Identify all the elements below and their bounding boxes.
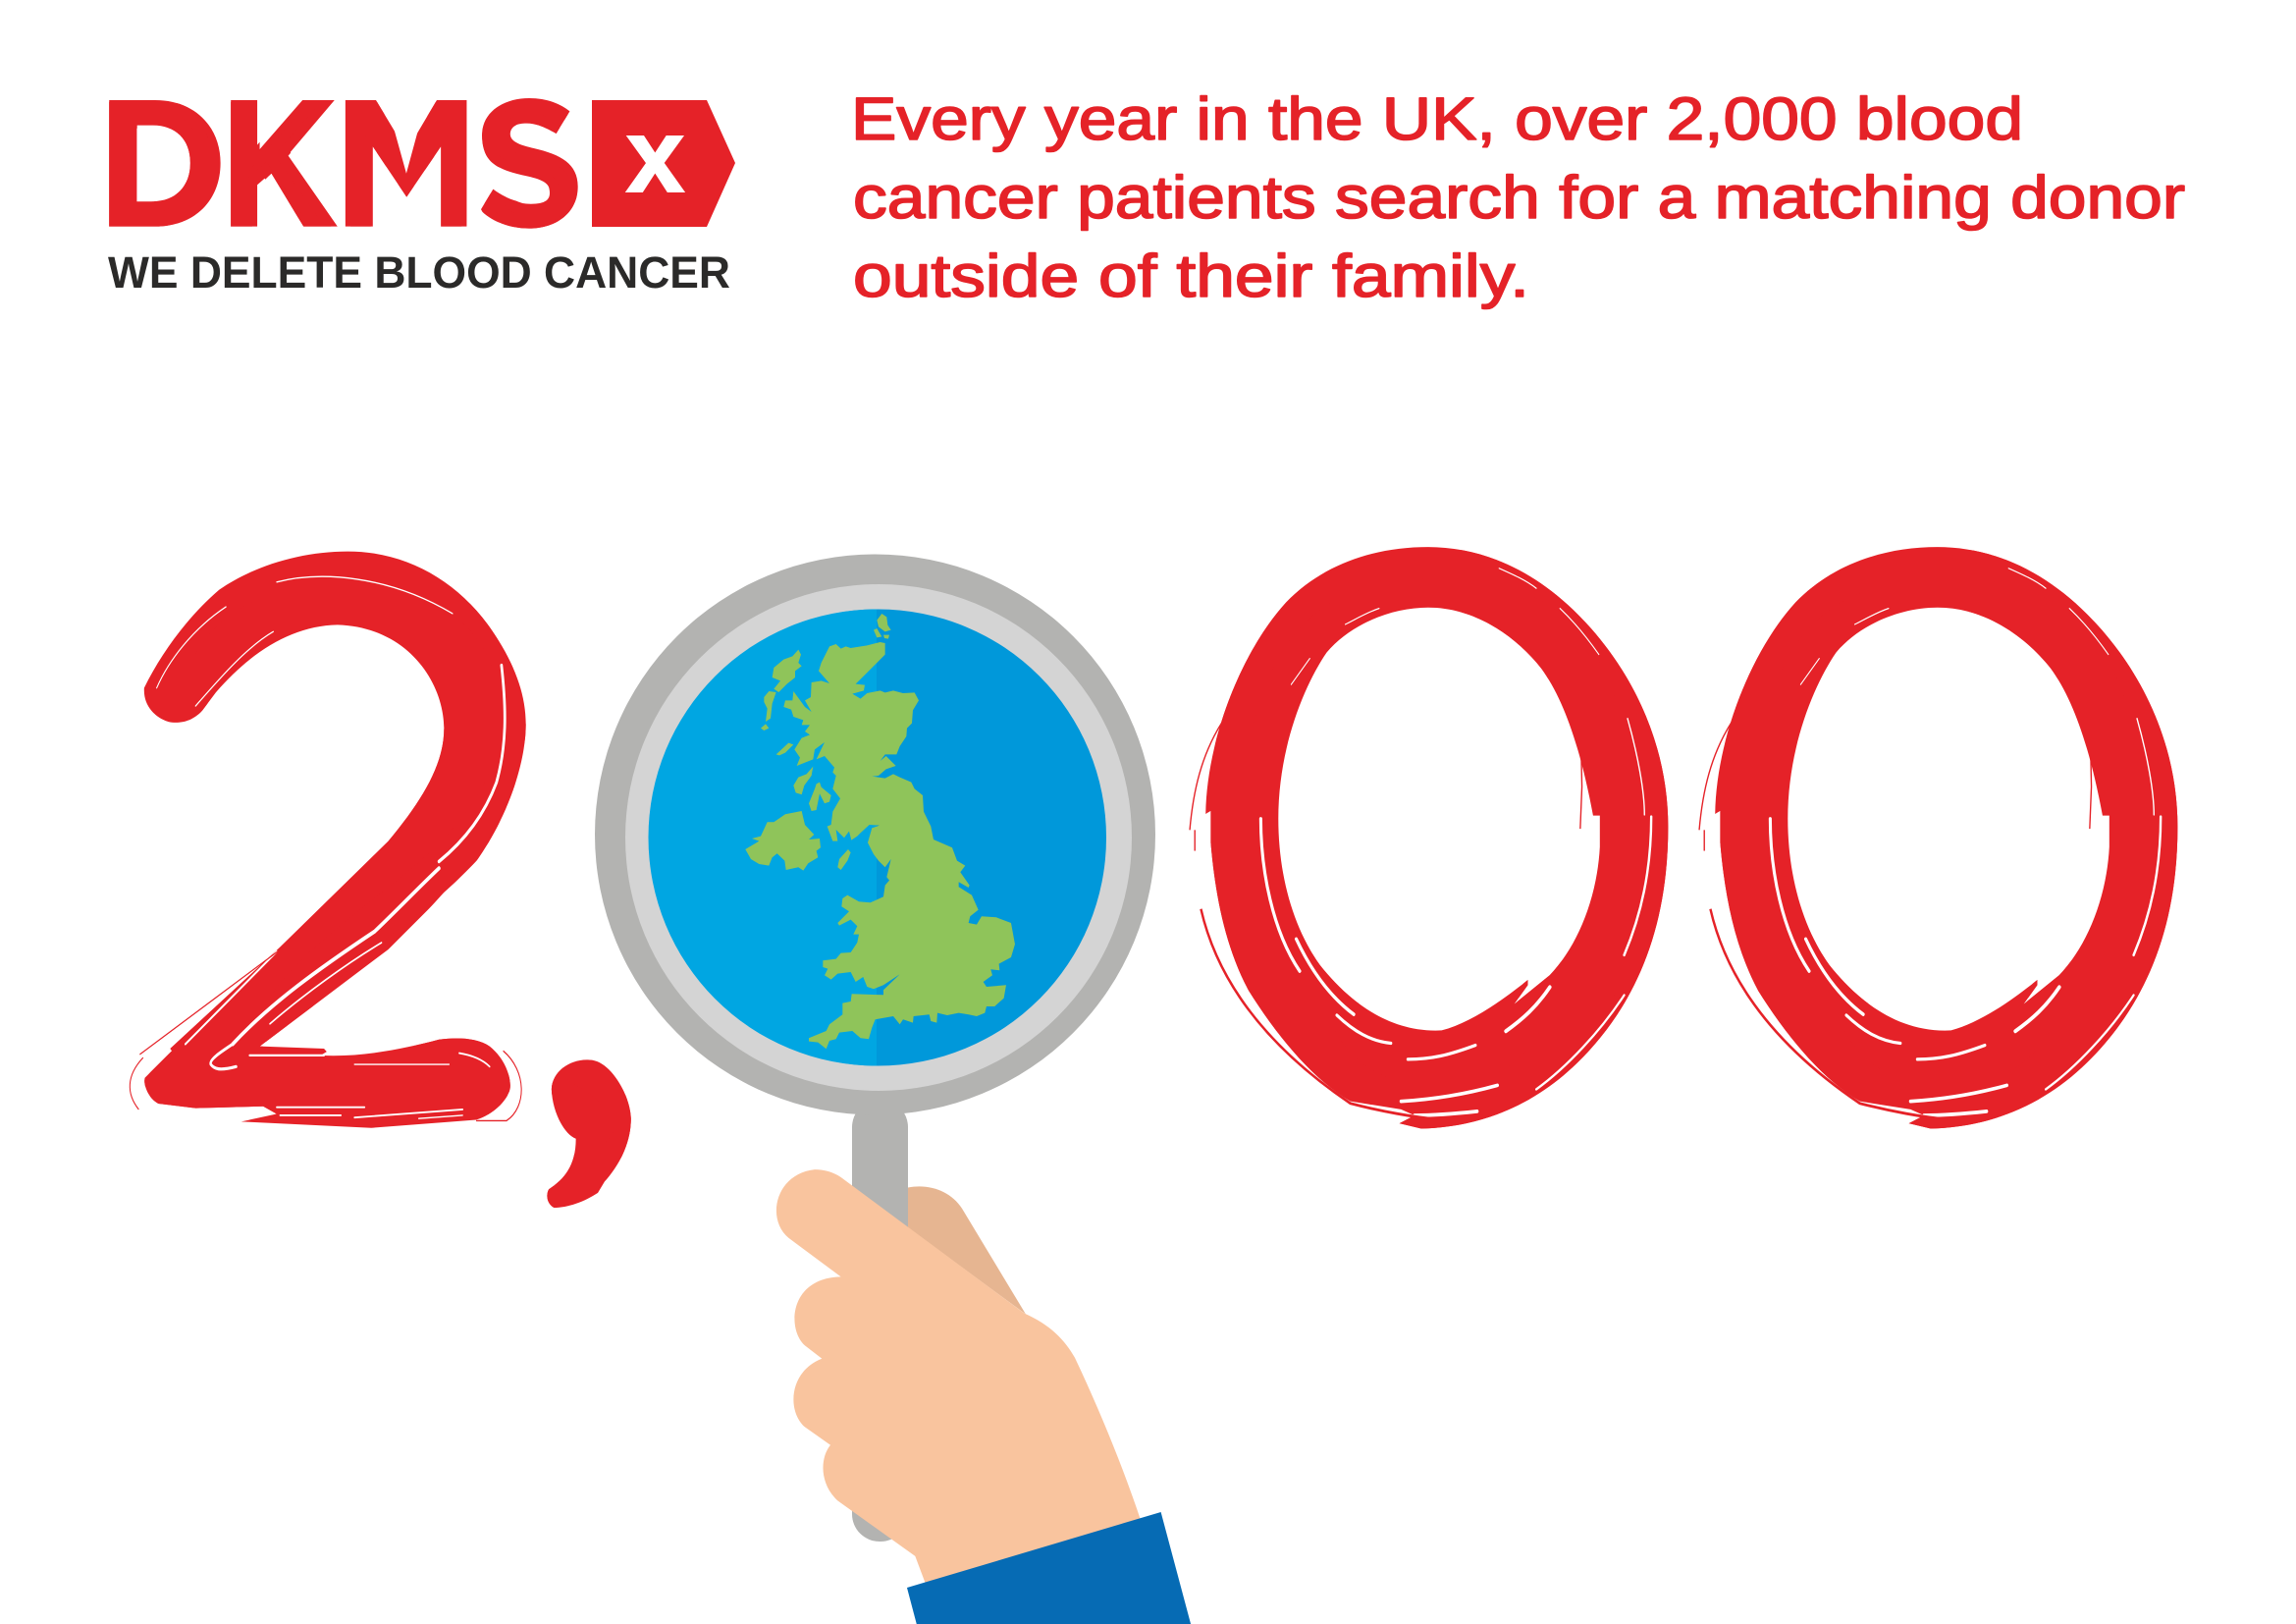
hand holding magnifier [776,1169,1191,1624]
map of the UK [745,614,1015,1049]
blue sleeve cuff [907,1512,1191,1624]
logo wordmark: DKMS [98,62,583,266]
big numeral 2: 2 [123,404,560,1281]
big numeral 2 [130,552,526,1128]
hand and front fingers [776,1169,1141,1583]
big numeral second 0 [1698,547,2177,1129]
big numeral second 0: 0 [1679,375,2218,1319]
headline text block: outside of their family. [853,243,1529,309]
logo wordmark [109,98,578,229]
headline text block [851,85,2185,309]
logo tag with x [592,98,735,227]
magnifier handle [852,1100,908,1542]
magnifier outer rim [595,554,1155,1115]
big numeral first 0 [1189,547,1669,1129]
headline text block: cancer patients search for a matching donor [853,164,2185,231]
big numeral first 0: 0 [1169,375,1709,1319]
back finger [908,1186,1026,1315]
logo: DKMS we delete blood cancer [108,98,735,289]
logo tag with x: x [626,98,684,214]
big comma: , [518,575,670,1249]
headline text block: Every year in the UK, over 2,000 blood [851,85,2023,152]
magnifying glass [595,554,1155,1542]
logo strapline: WE DELETE BLOOD CANCER [108,247,730,298]
lens: blue sea [649,609,1106,1066]
magnifier inner rim [625,584,1132,1091]
